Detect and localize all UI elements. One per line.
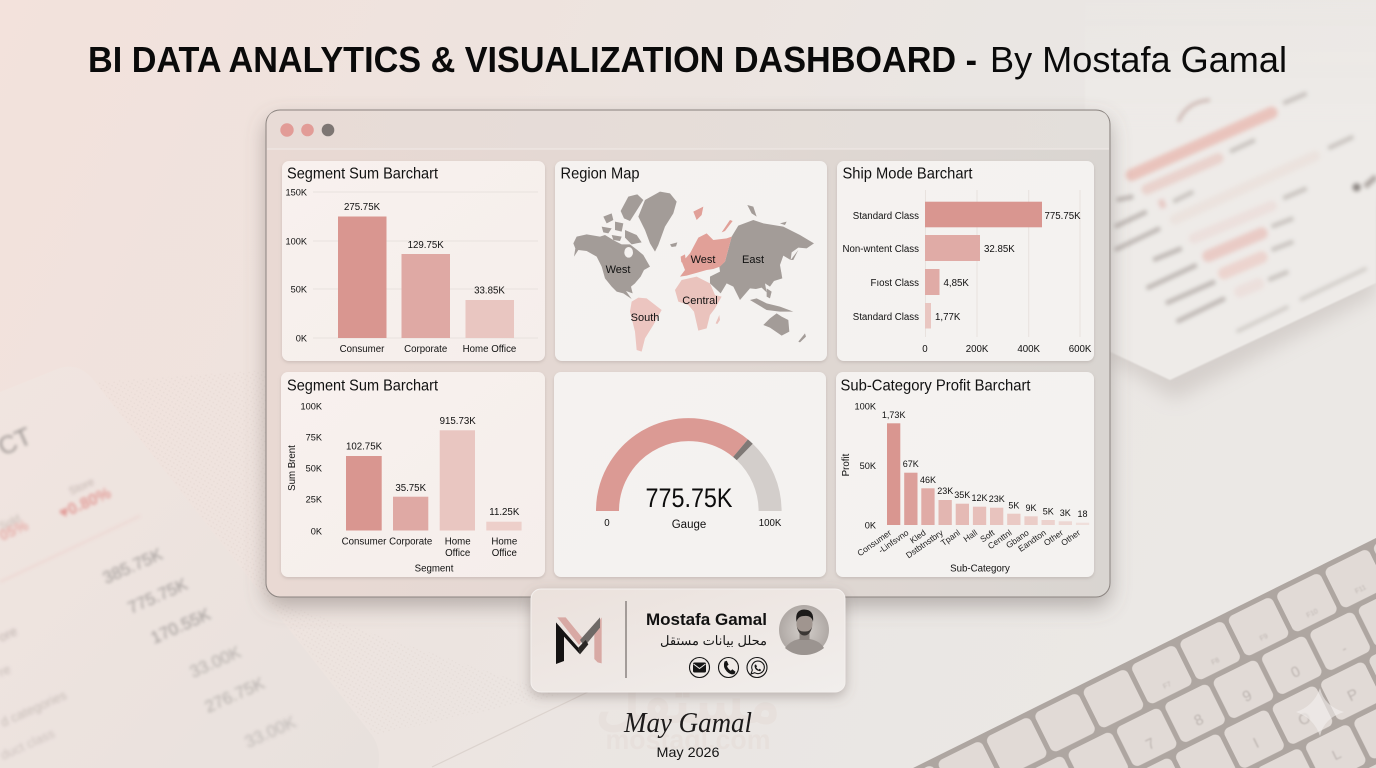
heading: Ship Mode Barchart [842, 166, 973, 182]
title: By Mostafa Gamal [990, 39, 1287, 80]
pink regions [680, 233, 732, 277]
gauge labels: Gauge [672, 519, 706, 531]
panel: sub-category profit bar chart [836, 372, 1094, 577]
bar chart: Consumer [340, 344, 385, 355]
bar chart [286, 188, 538, 355]
key legends: 7 [1143, 735, 1158, 754]
map labels [606, 254, 764, 324]
date: May 2026 [656, 744, 720, 760]
column chart: 46K [920, 475, 936, 485]
background keyboard [913, 538, 1376, 768]
icon: phone [718, 658, 738, 678]
column chart: 50K [860, 461, 877, 471]
panel: segment sum bar chart bottom [281, 372, 545, 577]
hudson bay [624, 247, 633, 258]
map labels: East [742, 254, 764, 266]
bar chart: 35.75K [395, 483, 427, 494]
bar chart: 150K [286, 188, 308, 198]
window control dots [280, 123, 334, 137]
horizontal bar chart: 1,77K [935, 312, 961, 323]
bar chart: Consumer [342, 536, 387, 548]
heading: Segment Sum Barchart [287, 378, 439, 394]
bar chart: Home Office [463, 344, 516, 355]
bar chart: Segment [415, 564, 454, 574]
background document: left: 385.75K [100, 544, 166, 588]
horizontal bar chart: 0 [922, 344, 928, 355]
key legends: 0 [1288, 663, 1303, 682]
author name: Mostafa Gamal [646, 610, 767, 629]
horizontal bar chart: Fıost Class [871, 278, 919, 289]
horizontal bar chart: 200K [966, 344, 989, 355]
bar chart: 100K [301, 402, 323, 412]
column chart: 1,73K [882, 410, 905, 420]
column chart: 12K [971, 493, 988, 503]
gauge labels [604, 518, 782, 531]
map labels: West [691, 254, 715, 266]
author photo [779, 605, 829, 655]
background document: left: Store [67, 476, 96, 498]
column chart: Kled [908, 527, 928, 545]
horizontal bar chart: 600K [1069, 344, 1092, 355]
column chart: Dstbtnstbry [904, 527, 945, 560]
column chart: 67K [903, 459, 919, 469]
window title bar [267, 111, 1109, 149]
title: BI DATA ANALYTICS & VISUALIZATION DASHBOARD - [88, 39, 977, 80]
icon: whatsapp [747, 658, 767, 678]
map labels: South [631, 312, 659, 324]
signature: May Gamal [623, 707, 752, 739]
horizontal bar chart: 32.85K [984, 244, 1015, 255]
bar chart: Sum Brent [287, 445, 298, 491]
bar chart: 50K [306, 464, 323, 474]
logo [556, 617, 602, 664]
column chart: 100K [855, 402, 877, 412]
heading: Segment Sum Barchart [287, 166, 439, 182]
key legends: O [1296, 709, 1314, 730]
desk texture [95, 370, 560, 735]
bar chart: Corporate [404, 344, 447, 355]
bar chart: Home [491, 536, 517, 548]
column chart: 23K [937, 486, 953, 496]
bar chart: Office [445, 548, 470, 559]
map labels: Central [682, 295, 718, 307]
world map [573, 192, 814, 352]
bar chart [287, 402, 522, 574]
bar chart: 50K [291, 284, 308, 294]
column chart: 18 [1077, 509, 1088, 519]
watermark: mostaql.com [606, 724, 770, 755]
gauge labels: 100K [759, 518, 782, 529]
column chart: Sub-Category [950, 564, 1010, 574]
gauge labels: 0 [604, 518, 610, 529]
background document: left: 33.00K [187, 642, 244, 682]
panel: ship mode bar chart [837, 161, 1094, 361]
background document: left [0, 367, 379, 768]
column chart: Profit [841, 453, 852, 476]
horizontal bar chart: Standard Class [853, 211, 919, 222]
key legends: F11 [1354, 584, 1368, 596]
column chart: 0K [865, 520, 877, 530]
horizontal bar chart: Non-wntent Class [843, 244, 919, 255]
horizontal bar chart [843, 190, 1092, 355]
background document: left: 170.55K [148, 604, 214, 648]
author card [531, 589, 845, 692]
column chart: 5K [1008, 500, 1019, 510]
bar chart: 0K [296, 334, 308, 344]
column chart: Tpanl [939, 527, 962, 548]
key legends: F10 [1306, 608, 1320, 620]
background document: left: ♥0.80% [57, 485, 114, 523]
background document: left: 775.75K [125, 574, 191, 618]
column chart: 3K [1060, 508, 1071, 518]
bar chart: 75K [306, 432, 323, 442]
bar chart: 102.75K [346, 442, 383, 452]
horizontal bar chart: 775.75K [1044, 211, 1081, 222]
bar chart: Corporate [389, 536, 432, 548]
panel: segment sum bar chart top [282, 161, 545, 361]
key legends: P [1345, 686, 1361, 705]
column chart: Hall [961, 527, 979, 544]
panel: region map [555, 161, 827, 361]
column chart: 35K [954, 490, 970, 500]
column chart: -Linfsvno [876, 527, 911, 555]
key legends: 9 [1240, 687, 1255, 706]
background document: left: 33.00K [242, 712, 299, 752]
column chart: 23K [989, 494, 1005, 504]
background document: right [1085, 0, 1376, 400]
column chart: Consumer [855, 527, 893, 558]
key legends: F8 [1211, 657, 1221, 667]
key legends: 8 [1191, 711, 1207, 730]
panel: gauge [554, 372, 826, 577]
card divider [625, 601, 627, 678]
background document: left: d categories [0, 687, 69, 730]
bar chart: 11.25K [489, 507, 520, 518]
key legends: I [1251, 735, 1262, 752]
bar chart: Office [492, 548, 517, 559]
column chart: 5K [1043, 506, 1054, 516]
column chart [841, 402, 1089, 574]
column chart: Other [1059, 527, 1082, 548]
column chart: Other [1042, 527, 1065, 548]
background document: left: 276.75K [202, 673, 268, 717]
watermark: مستقل [595, 667, 781, 736]
heading: Region Map [560, 166, 640, 182]
icon: mail [690, 658, 710, 678]
horizontal bar chart: 400K [1017, 344, 1041, 355]
horizontal bar chart: Standard Class [853, 312, 919, 323]
paper edge line [432, 691, 590, 767]
bar chart: 33.85K [474, 286, 505, 296]
bar chart: 915.73K [440, 416, 476, 427]
bar chart: 25K [306, 494, 323, 504]
author role: محلل بيانات مستقل [660, 633, 767, 648]
grey regions [573, 192, 814, 342]
heading: Sub-Category Profit Barchart [840, 378, 1031, 394]
column chart: Eandton [1016, 527, 1048, 554]
gauge value: 775.75K [646, 483, 732, 513]
icon: sparkle watermark [1296, 688, 1344, 736]
bar chart: 275.75K [344, 202, 381, 213]
gauge arc [608, 430, 770, 511]
key legends: F7 [1162, 681, 1173, 691]
column chart: 9K [1025, 503, 1037, 513]
bar chart: 100K [286, 236, 308, 246]
key legends: - [1339, 641, 1349, 656]
key legends: L [1329, 745, 1344, 763]
key legends [1143, 584, 1368, 763]
column chart: Centtnl [986, 527, 1014, 551]
key legends: F9 [1259, 633, 1269, 643]
column chart: Gbano [1004, 527, 1031, 550]
bar chart: 0K [311, 526, 323, 536]
column chart: Soft [978, 527, 997, 544]
map labels: West [606, 264, 630, 276]
bar chart: 129.75K [408, 240, 444, 251]
horizontal bar chart: 4,85K [944, 278, 969, 289]
bar chart: Home [445, 536, 471, 548]
dashboard window [266, 110, 1110, 597]
